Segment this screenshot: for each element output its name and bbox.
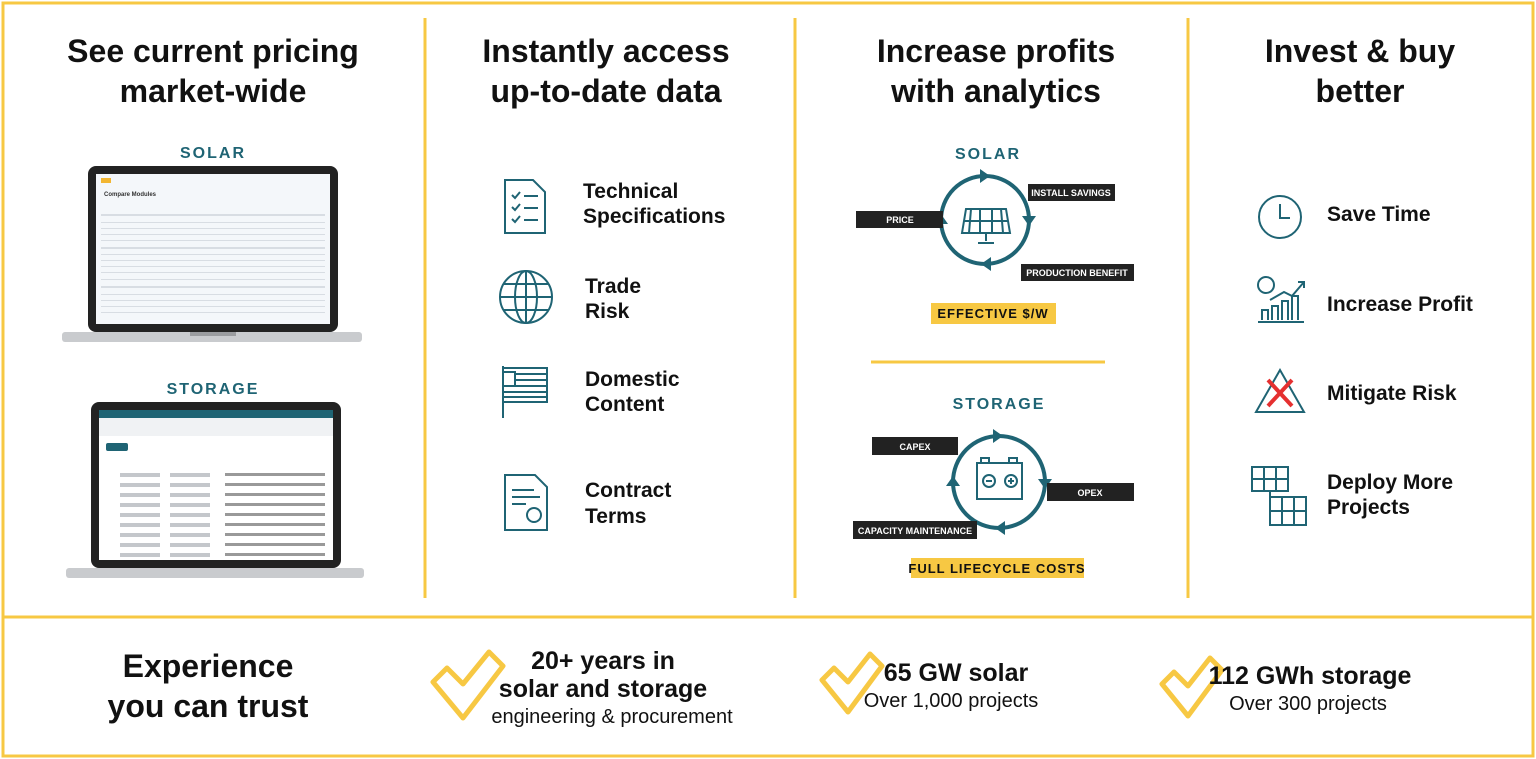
label: solar: SOLAR <box>180 145 246 162</box>
icon: flag <box>503 366 547 418</box>
heading: invest: Invest & buy <box>1265 33 1455 69</box>
heading: pricing: market-wide <box>120 73 306 109</box>
stat: 20+ years: engineering & procurement <box>491 706 733 728</box>
text: domestic content: Domestic <box>585 368 680 391</box>
text: trade risk: Trade <box>585 275 641 298</box>
diagram: solar cycle: INSTALL SAVINGS <box>1031 188 1111 198</box>
text: save time: Save Time <box>1327 203 1431 226</box>
text: contract terms: Contract <box>585 479 671 502</box>
icon: profit chart <box>1258 277 1304 322</box>
stat: 20+ years: solar and storage <box>499 675 707 703</box>
laptop: solar: Compare Modules <box>104 192 157 198</box>
panel: data <box>482 33 730 530</box>
diagram: solar cycle: PRICE <box>886 215 914 225</box>
icon: checklist <box>505 180 545 233</box>
heading: data: Instantly access <box>482 33 730 69</box>
text: technical specifications: Technical <box>583 180 678 203</box>
text: mitigate risk: Mitigate Risk <box>1327 382 1457 405</box>
stat: 20+ years <box>433 647 733 728</box>
diagram: storage cycle <box>853 429 1134 539</box>
stat: 65 GW <box>822 654 1038 712</box>
panel: experience <box>108 647 1412 728</box>
diagram: solar cycle: PRODUCTION BENEFIT <box>1026 268 1128 278</box>
badge: full lifecycle costs: FULL LIFECYCLE COSTS <box>908 561 1086 576</box>
stat: 112 GWh: 112 GWh storage <box>1209 662 1412 690</box>
laptop: storage <box>66 402 364 578</box>
stat: 112 GWh <box>1162 658 1412 716</box>
heading: experience: you can trust <box>108 688 309 724</box>
diagram: storage cycle: OPEX <box>1077 488 1103 498</box>
stat: 112 GWh: Over 300 projects <box>1229 693 1387 715</box>
icon: contract <box>505 475 547 530</box>
text: trade risk: Risk <box>585 300 630 323</box>
laptop: solar <box>62 166 362 342</box>
panel: invest <box>1252 33 1473 525</box>
stat: 20+ years: 20+ years in <box>531 647 675 675</box>
diagram: storage cycle: CAPEX <box>899 442 931 452</box>
heading: data: up-to-date data <box>490 73 722 109</box>
heading: analytics: Increase profits <box>877 33 1115 69</box>
heading: analytics: with analytics <box>890 73 1101 109</box>
label: storage: STORAGE <box>953 396 1045 413</box>
badge: effective $/W: EFFECTIVE $/W <box>937 306 1049 321</box>
panel: analytics <box>853 33 1134 578</box>
stat: 65 GW: 65 GW solar <box>884 659 1029 687</box>
label: solar: SOLAR <box>955 146 1021 163</box>
icon: solar panels <box>1252 467 1306 525</box>
heading: experience: Experience <box>123 648 293 684</box>
panel: pricing <box>62 33 364 578</box>
diagram: solar cycle <box>856 169 1134 281</box>
text: deploy more projects: Deploy More <box>1327 471 1453 494</box>
icon: globe <box>500 271 552 323</box>
text: increase profit: Increase Profit <box>1327 293 1473 316</box>
text: contract terms: Terms <box>585 505 646 528</box>
label: storage: STORAGE <box>167 381 259 398</box>
stat: 65 GW: Over 1,000 projects <box>864 690 1038 712</box>
text: domestic content: Content <box>585 393 664 416</box>
heading: pricing: See current pricing <box>67 33 359 69</box>
badge: effective $/W <box>931 303 1056 324</box>
icon: warning <box>1256 370 1304 412</box>
heading: invest: better <box>1316 73 1404 109</box>
diagram: storage cycle: CAPACITY MAINTENANCE <box>858 526 972 536</box>
icon: clock <box>1259 196 1301 238</box>
text: technical specifications: Specifications <box>583 205 725 228</box>
text: deploy more projects: Projects <box>1327 496 1410 519</box>
